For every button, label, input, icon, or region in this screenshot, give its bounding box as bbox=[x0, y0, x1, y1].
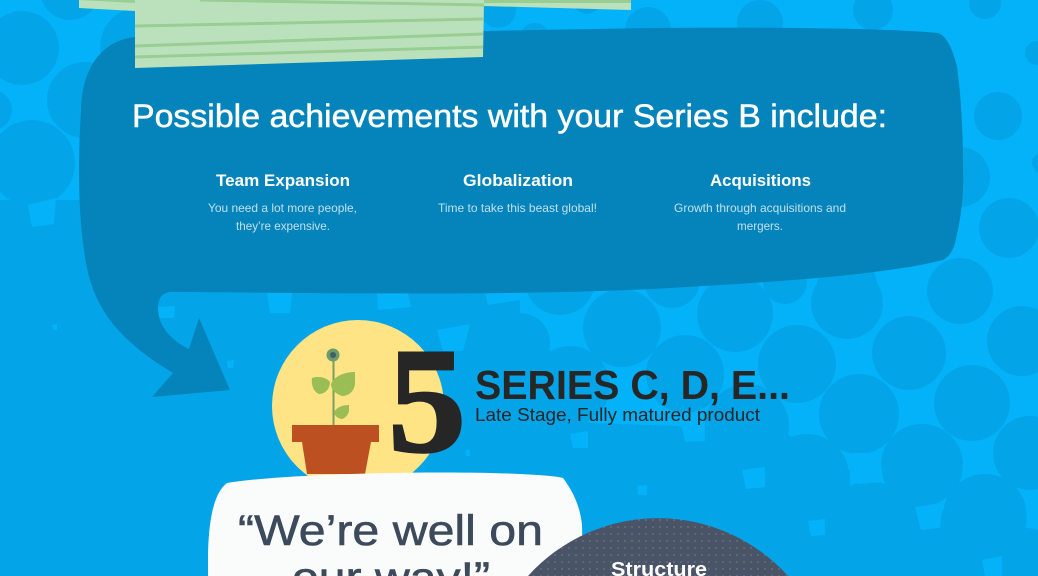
achievement: acquisitions: Growth through acquisitions and bbox=[674, 201, 846, 215]
icon: potted plant bbox=[292, 348, 379, 474]
yellow sun circle bbox=[272, 320, 444, 492]
achievement: acquisitions bbox=[674, 171, 846, 233]
achievement: globalization bbox=[438, 171, 597, 215]
heading: possible achievements: Possible achievements with your Series B include: bbox=[132, 98, 887, 134]
achievement: acquisitions: mergers. bbox=[737, 219, 783, 233]
subheading: late stage: Late Stage, Fully matured product bbox=[475, 405, 760, 425]
achievement: team expansion: Team Expansion bbox=[216, 171, 350, 190]
panel: series B achievements with arrow tail bbox=[79, 28, 963, 397]
achievement: acquisitions: Acquisitions bbox=[710, 171, 811, 190]
achievement: team expansion: they’re expensive. bbox=[236, 219, 330, 233]
heading: series C, D, E: SERIES C, D, E... bbox=[475, 362, 790, 408]
achievement: team expansion: You need a lot more people, bbox=[208, 201, 357, 215]
quote text: “We’re well on bbox=[238, 507, 543, 555]
achievement: team expansion bbox=[208, 171, 357, 233]
step number 5: 5 bbox=[388, 318, 466, 484]
quote card bbox=[208, 472, 583, 576]
achievement: globalization: Time to take this beast global! bbox=[438, 201, 597, 215]
achievement: globalization: Globalization bbox=[463, 171, 573, 190]
green paper stack bbox=[79, 0, 631, 68]
structure circle bbox=[528, 518, 788, 576]
